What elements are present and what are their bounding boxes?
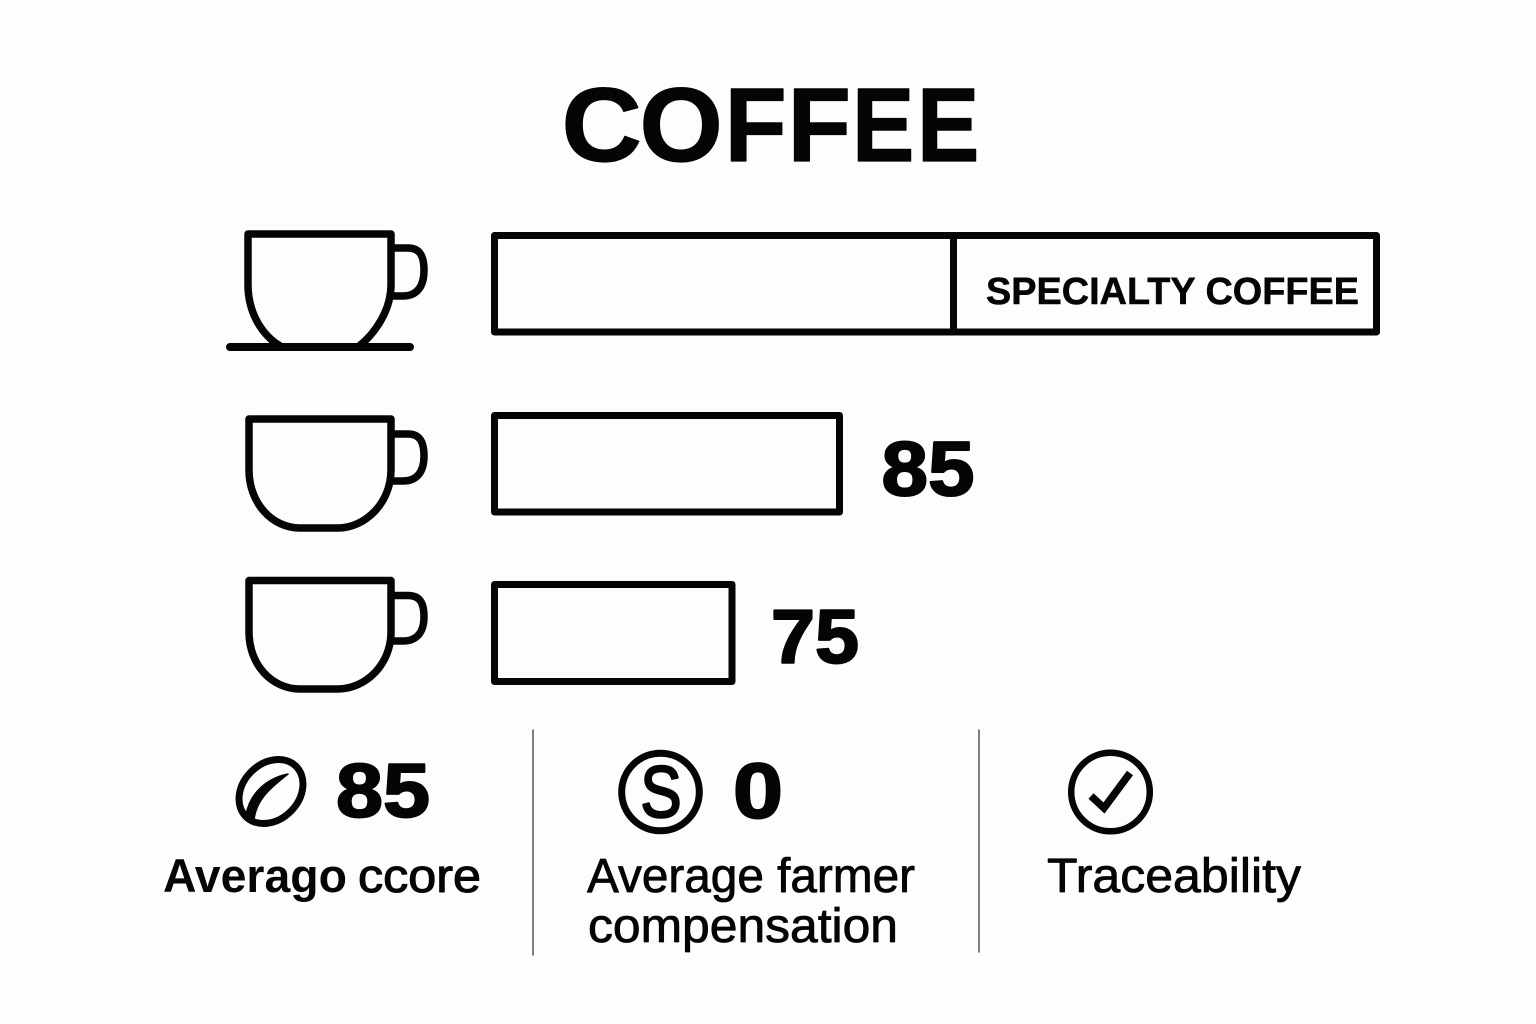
- title: O: [640, 67, 723, 184]
- stat: traceability: [1047, 753, 1301, 903]
- bar: 75: [494, 584, 732, 682]
- label: traceability: Traceability: [1047, 850, 1301, 903]
- bar: specialty coffee: [494, 236, 1376, 332]
- title: F: [788, 67, 851, 184]
- title: C: [562, 66, 642, 183]
- icon: cup on saucer: [230, 234, 424, 347]
- value: average score: 85: [336, 749, 430, 834]
- label: farmer compensation: compensation: [588, 900, 898, 953]
- label: average score: Averago: [163, 849, 347, 902]
- value: farmer compensation: 0: [733, 746, 783, 834]
- bar label: specialty coffee: SPECIALTY COFFEE: [986, 271, 1359, 313]
- title: [562, 66, 979, 184]
- title: E: [852, 67, 914, 184]
- title: F: [724, 66, 787, 183]
- icon: dollar coin: [622, 753, 699, 833]
- label: average score: ccore: [358, 849, 481, 902]
- divider line: [978, 730, 980, 952]
- icon: coffee bean: [226, 747, 316, 836]
- icon: cup three: [249, 580, 424, 689]
- value: 75: 75: [771, 595, 859, 680]
- value: 85: 85: [882, 426, 974, 512]
- bar: 85: [494, 416, 840, 512]
- stat: farmer compensation: [587, 746, 915, 953]
- divider line: [532, 730, 534, 955]
- icon: cup two: [249, 419, 424, 528]
- stat: average score: [163, 747, 481, 902]
- label: farmer compensation: Average farmer: [587, 850, 915, 903]
- icon: check circle: [1071, 753, 1150, 831]
- title: E: [917, 67, 979, 184]
- icon: dollar coin: S: [640, 753, 682, 833]
